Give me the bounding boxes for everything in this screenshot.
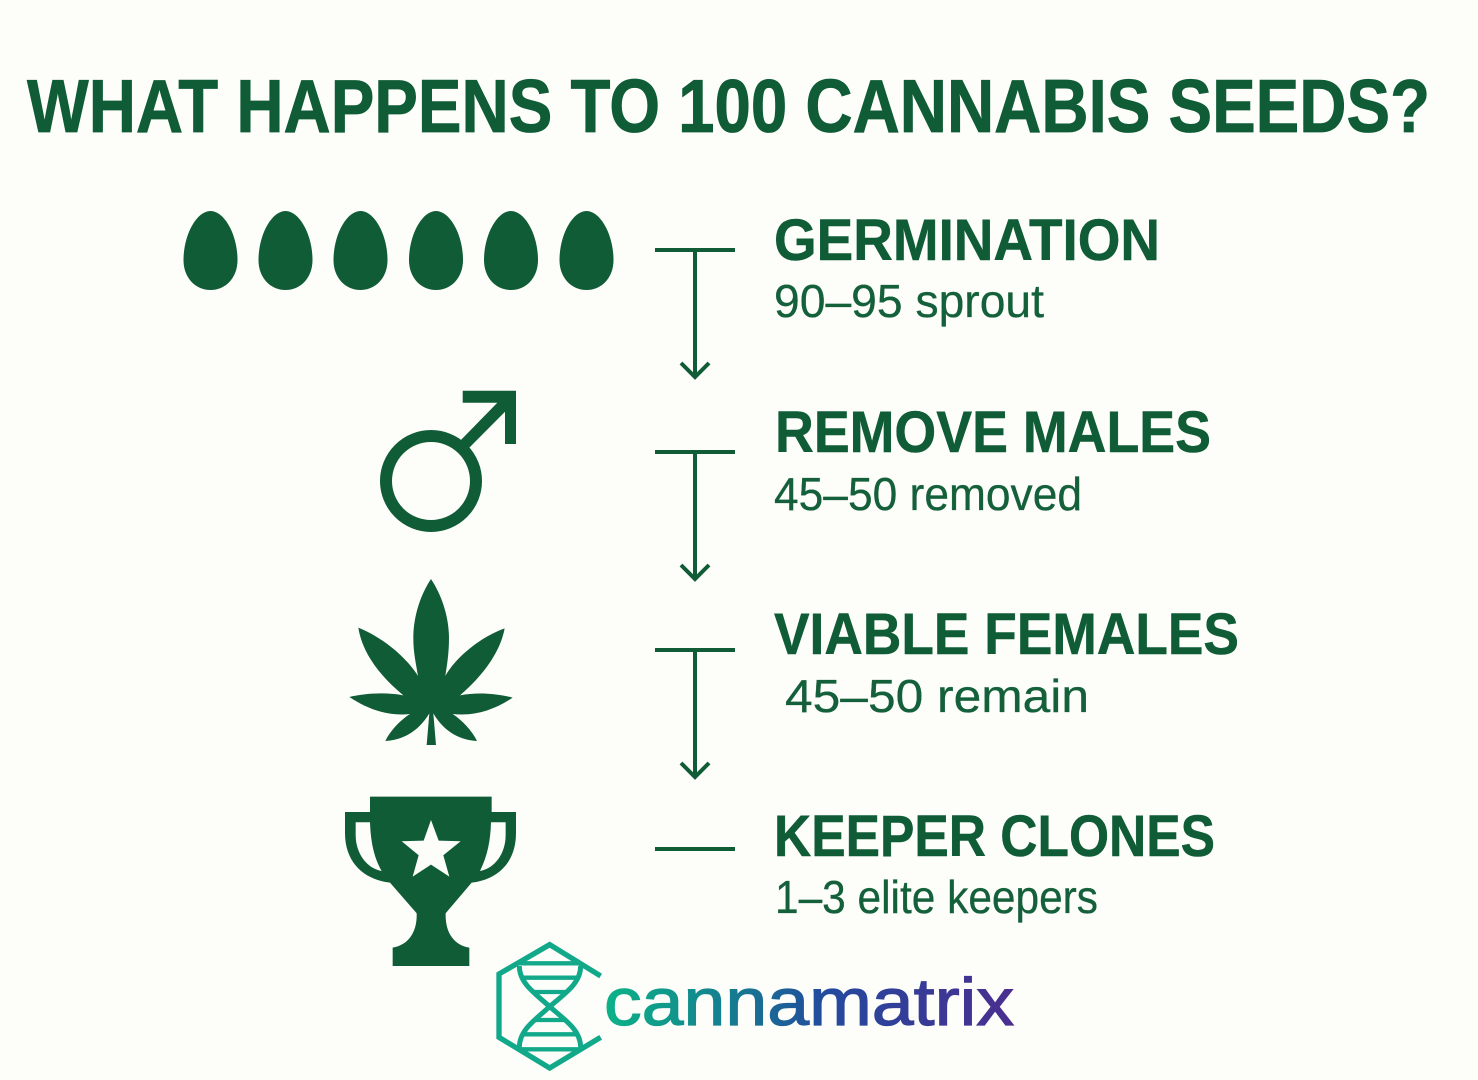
logo icon: hexagon with DNA helix bbox=[499, 945, 601, 1068]
icon: six seeds bbox=[184, 211, 614, 290]
icon: male symbol bbox=[386, 391, 516, 526]
text: keeper clones detail: 1–3 elite keepers bbox=[775, 871, 1098, 923]
heading: remove males: REMOVE MALES bbox=[775, 400, 1211, 465]
logo wordmark: cannamatrix bbox=[604, 965, 1014, 1040]
arrow: viable females to keeper clones bbox=[655, 650, 735, 777]
arrow: remove males to viable females bbox=[655, 452, 735, 579]
icon: trophy with star bbox=[345, 797, 516, 966]
icon: cannabis leaf bbox=[349, 579, 513, 745]
text: germination detail: 90–95 sprout bbox=[774, 275, 1044, 327]
text: remove males detail: 45–50 removed bbox=[774, 468, 1082, 520]
heading: keeper clones: KEEPER CLONES bbox=[774, 804, 1215, 869]
heading: viable females: VIABLE FEMALES bbox=[774, 602, 1239, 667]
heading: germination: GERMINATION bbox=[774, 208, 1160, 273]
arrow: germination to remove males bbox=[655, 250, 735, 377]
divider dash: keeper clones bbox=[655, 847, 735, 851]
text: viable females detail: 45–50 remain bbox=[785, 670, 1089, 722]
